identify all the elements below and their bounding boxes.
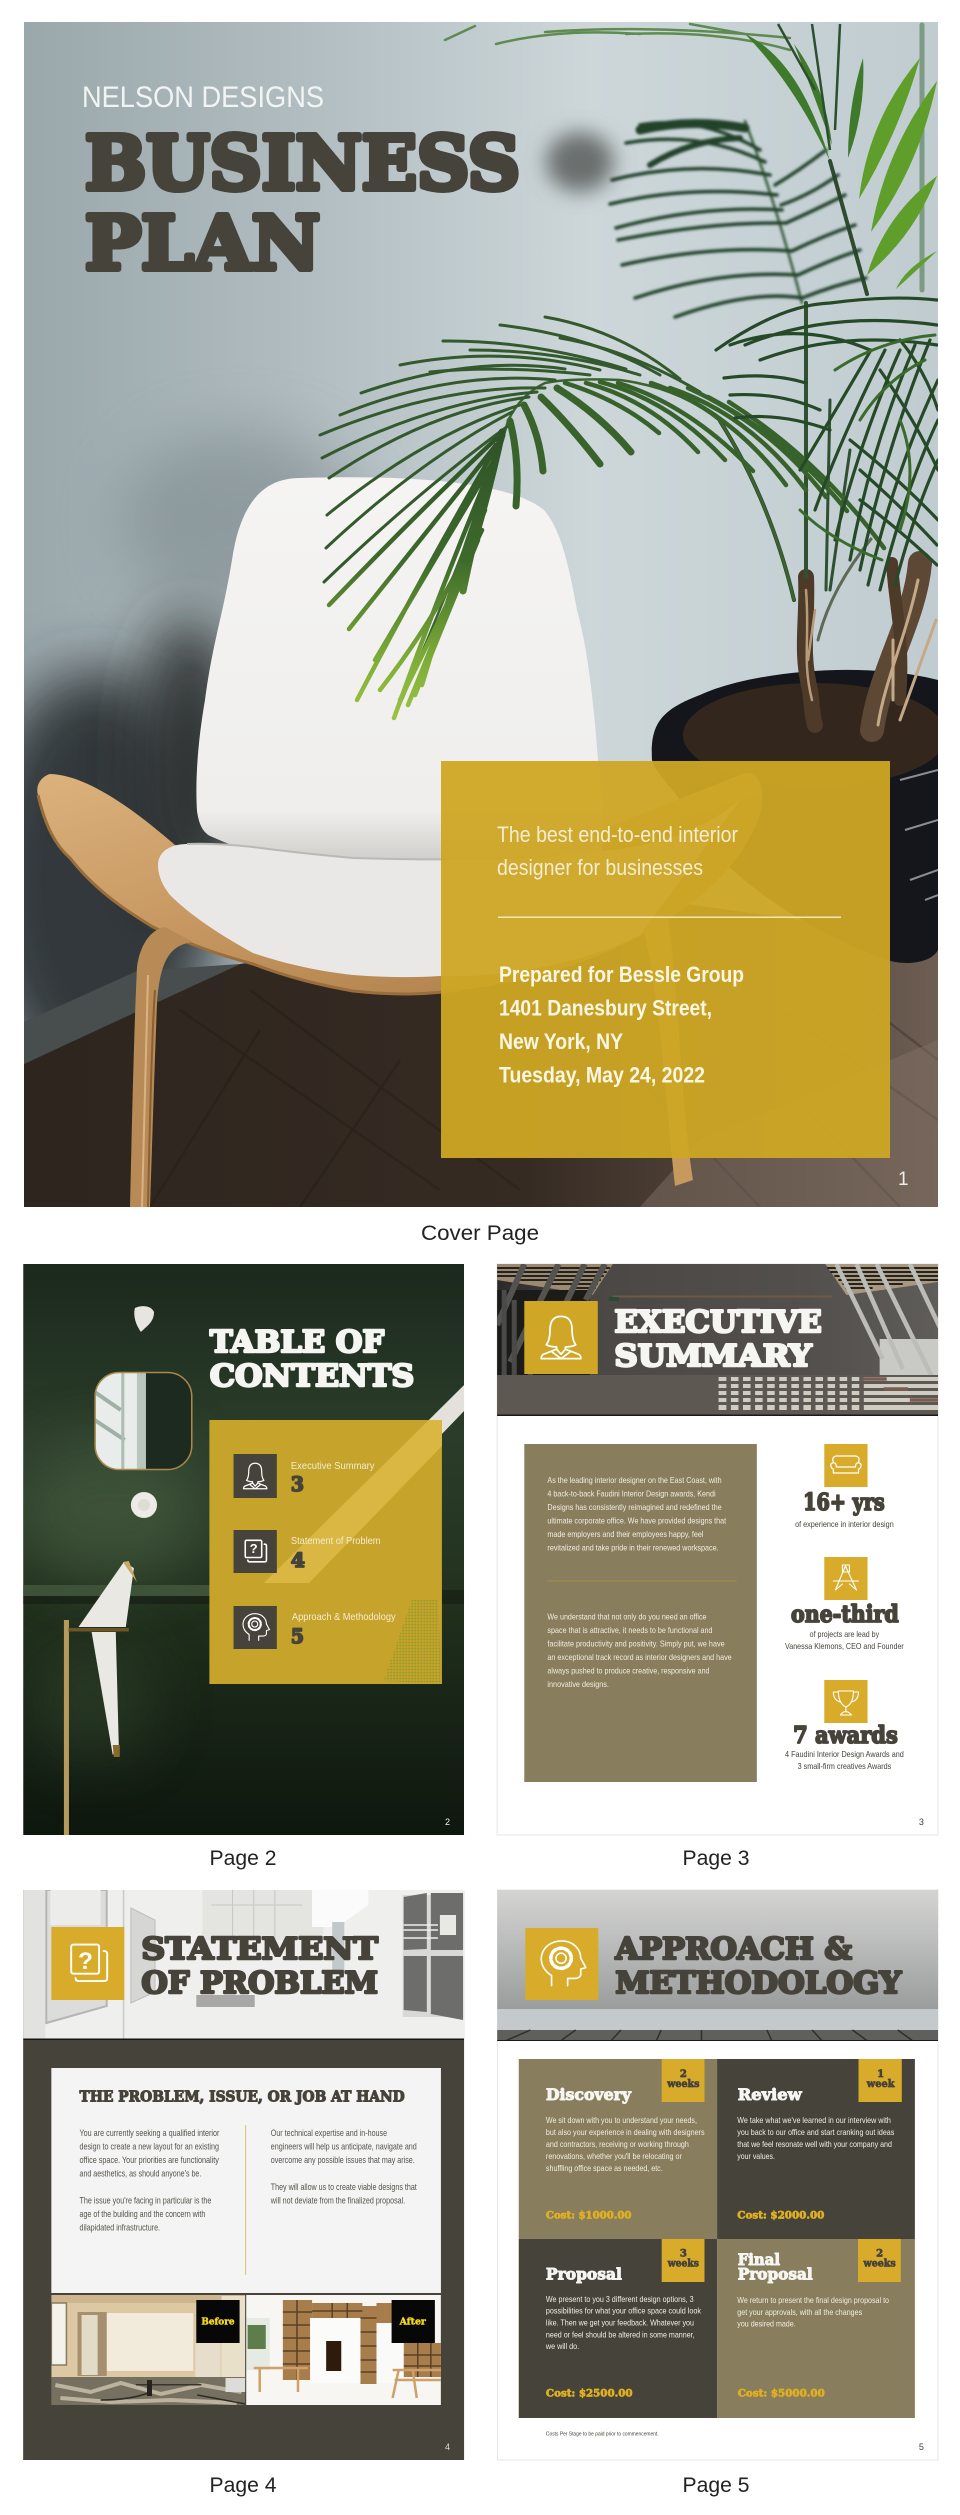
after photo — [246, 2295, 442, 2405]
card: review: you back to our office and start cranking out ideas — [737, 2127, 894, 2137]
olive text panel: always pushed to produce creative, responsive and — [547, 1666, 710, 1675]
panel: page 2 table of contents — [10, 1264, 464, 1835]
prepared-for details: Prepared for Bessle Group — [499, 962, 744, 987]
tagline: The best end-to-end interior — [497, 822, 738, 847]
olive text panel: space that is attractive, it needs to be functional and — [547, 1625, 713, 1635]
heading — [614, 1304, 822, 1373]
white text card: and aesthetics, as should anyone's be. — [80, 2169, 201, 2178]
panel: cover page — [0, 22, 947, 1207]
olive text panel: made employers and their employees happy, feel — [547, 1529, 704, 1539]
card: proposal — [519, 2239, 717, 2418]
card: discovery: shuffling office space as needed, etc. — [546, 2163, 663, 2173]
white text card: They will allow us to create viable designs that — [271, 2182, 417, 2192]
rosette — [131, 1492, 157, 1518]
tagline: designer for businesses — [497, 855, 703, 880]
card: discovery: weeks — [666, 2079, 700, 2090]
origami bird — [79, 1561, 137, 1757]
card: final proposal: Cost: $5000.00 — [738, 2388, 825, 2399]
left lattice — [497, 1264, 613, 1295]
card: final proposal: Proposal — [738, 2265, 813, 2283]
heading: OF PROBLEM — [141, 1965, 378, 2000]
card: proposal: Proposal — [546, 2265, 622, 2283]
tagline — [497, 822, 738, 880]
plant stems — [720, 25, 922, 640]
stat: one-third: Vanessa Klemons, CEO and Founder — [785, 1641, 904, 1651]
stat: one-third — [785, 1557, 904, 1651]
olive text panel: facilitate productivity and positivity. Simply put, we have — [547, 1639, 725, 1648]
page number: 1 — [898, 1169, 909, 1190]
panel: page 3 executive summary — [497, 1264, 942, 1835]
right lattice — [825, 1264, 938, 1295]
white text card: office space. Your priorities are functionality — [80, 2155, 219, 2165]
stat: years — [795, 1444, 894, 1529]
wall bird — [134, 1306, 154, 1332]
caption: Page 4 — [210, 2474, 277, 2497]
card: proposal: We present to you 3 different design options, 3 — [546, 2294, 694, 2304]
page number: 3 — [919, 1817, 924, 1827]
title — [85, 121, 520, 287]
olive text panel: revitalized and take pride in their renewed workspace. — [547, 1543, 719, 1552]
palm: upright leaves — [745, 34, 863, 161]
heading — [614, 1931, 902, 2000]
icon box: head with gear — [525, 1928, 598, 2000]
caption: Cover Page — [421, 1222, 539, 1245]
card: review: Review — [738, 2085, 802, 2104]
white text card: age of the building and the concern with — [80, 2209, 205, 2219]
stat: one-third: of projects are lead by — [810, 1629, 880, 1639]
chair cushion — [158, 844, 441, 978]
baseboard — [24, 964, 240, 1064]
item: executive summary — [234, 1454, 374, 1498]
card: proposal: weeks — [667, 2259, 699, 2269]
contents panel — [209, 1420, 442, 1684]
heading: CONTENTS — [210, 1358, 414, 1393]
stat: one-third: one-third — [791, 1601, 899, 1628]
before photo — [51, 2295, 246, 2405]
olive text panel: As the leading interior designer on the East Coast, with — [547, 1475, 722, 1485]
card: proposal: need or feel should be altered in some manner, — [546, 2330, 695, 2339]
heading — [210, 1324, 414, 1393]
trunks — [805, 563, 936, 730]
card: final proposal: Final — [738, 2250, 780, 2269]
stat: awards: 3 small-firm creatives Awards — [798, 1761, 891, 1771]
panel: page 4 statement of problem — [23, 1890, 464, 2460]
white text card — [51, 2068, 441, 2293]
label: before: Before — [201, 2317, 235, 2327]
card: discovery — [519, 2059, 717, 2239]
item: approach and methodology — [234, 1606, 396, 1649]
card: discovery: but also your experience in dealing with designers — [546, 2127, 705, 2137]
card: final proposal: weeks — [863, 2259, 896, 2269]
item: statement of problem — [234, 1530, 381, 1573]
card: discovery: renovations, whether you'll be relocating or — [546, 2151, 682, 2161]
white text card: overcome any possible issues that may arise. — [271, 2155, 415, 2165]
card: final proposal — [717, 2239, 915, 2418]
prepared-for details: New York, NY — [499, 1029, 623, 1054]
card: proposal: we will do. — [545, 2341, 579, 2351]
panel: page 5 approach and methodology — [497, 1890, 938, 2460]
item: statement of problem: ? — [250, 1541, 258, 1556]
card: review: We take what we've learned in our interview with — [737, 2115, 891, 2125]
prepared-for details: Tuesday, May 24, 2022 — [499, 1063, 705, 1088]
floor — [24, 900, 938, 1207]
caption: Page 3 — [682, 1847, 750, 1870]
heading: SUMMARY — [614, 1338, 813, 1373]
heading: TABLE OF — [210, 1324, 384, 1359]
olive text panel: We understand that not only do you need an office — [547, 1612, 707, 1621]
item: executive summary: 3 — [291, 1472, 304, 1496]
item: executive summary: Executive Summary — [291, 1461, 374, 1472]
card: final proposal: you desired made. — [737, 2319, 796, 2328]
item: approach and methodology: Approach & Methodology — [292, 1612, 396, 1623]
room photo — [10, 1264, 464, 1835]
item: approach and methodology: 5 — [291, 1624, 304, 1648]
card: proposal: Cost: $2500.00 — [546, 2388, 633, 2399]
white text card: The issue you're facing in particular is the — [80, 2196, 211, 2205]
white text card: Our technical expertise and in-house — [271, 2128, 387, 2138]
card: proposal: like. Then we get your feedback. Whatever you — [546, 2318, 694, 2328]
stat: awards: 4 Faudini Interior Design Awards and — [785, 1749, 904, 1759]
card: review — [717, 2059, 915, 2239]
card: discovery: Discovery — [546, 2085, 632, 2104]
heading: EXECUTIVE — [614, 1304, 822, 1339]
heading — [141, 1931, 378, 2000]
item: statement of problem: 4 — [291, 1548, 305, 1572]
title: PLAN — [85, 201, 320, 287]
title: BUSINESS — [85, 121, 520, 207]
card: discovery: 2 — [680, 2069, 687, 2080]
stat: years: 16+ yrs — [803, 1489, 885, 1516]
label: after: After — [399, 2317, 427, 2327]
palm: blurred back frond — [610, 121, 866, 317]
company name: NELSON DESIGNS — [82, 81, 324, 114]
chair back — [196, 477, 603, 870]
caption: Page 2 — [210, 1847, 276, 1870]
caption: Page 5 — [682, 2474, 750, 2497]
card: review: that we feel resonate well with your company and — [737, 2139, 892, 2149]
palm: drooping frond — [394, 379, 794, 718]
white text card: will not deviate from the finalized proposal. — [270, 2196, 405, 2205]
olive text panel: 4 back-to-back Faudini Interior Design awards, Kendi — [547, 1489, 716, 1498]
cover photo: chair and palm — [0, 22, 947, 1207]
card: proposal: possibilities for what your office space could look — [546, 2306, 702, 2316]
chair legs — [130, 927, 193, 1207]
prepared-for details — [499, 962, 744, 1088]
prepared-for details: 1401 Danesbury Street, — [499, 996, 712, 1020]
mirror — [146, 1374, 191, 1469]
header photo — [23, 1890, 464, 2040]
gold text panel — [441, 761, 890, 1158]
item: statement of problem: Statement of Problem — [291, 1536, 381, 1547]
moulding strip — [429, 1385, 464, 1434]
olive text panel — [524, 1444, 757, 1782]
icon box: woman — [524, 1301, 598, 1374]
white text card: dilapidated infrastructure. — [80, 2223, 160, 2232]
stat: years: of experience in interior design — [795, 1519, 894, 1529]
olive text panel: an exceptional track record as interior designers and have — [547, 1652, 732, 1662]
card: final proposal: We return to present the final design proposal to — [737, 2295, 889, 2305]
page number: 2 — [445, 1817, 450, 1827]
stat: awards — [785, 1680, 904, 1771]
olive text panel: Designs has consistently reimagined and redefined the — [547, 1502, 722, 1512]
white text card: You are currently seeking a qualified interior — [80, 2128, 219, 2138]
card: review: 1 — [877, 2069, 884, 2080]
card: review: Cost: $2000.00 — [737, 2210, 824, 2221]
white text card: engineers will help us anticipate, navigate and — [271, 2142, 417, 2151]
card: final proposal: get your approvals, with all the changes — [737, 2307, 862, 2317]
white text card: design to create a new layout for an existing — [80, 2142, 219, 2151]
palm: top frond — [445, 24, 790, 50]
header photo — [497, 1264, 942, 1416]
heading: STATEMENT — [141, 1931, 378, 1966]
stat: awards: 7 awards — [793, 1722, 898, 1749]
card: proposal: 3 — [680, 2249, 687, 2259]
pot — [652, 670, 938, 963]
card: discovery: We sit down with you to understand your needs, — [546, 2115, 697, 2125]
brass stand — [64, 1620, 69, 1835]
heading: METHODOLOGY — [615, 1965, 902, 2000]
icon box: question cards — [51, 1927, 124, 2000]
white text card: THE PROBLEM, ISSUE, OR JOB AT HAND — [80, 2089, 405, 2105]
olive text panel: ultimate corporate office. We have provided designs that — [547, 1516, 727, 1525]
card: discovery: Cost: $1000.00 — [546, 2210, 632, 2221]
card: final proposal: 2 — [876, 2249, 883, 2259]
header photo — [497, 1890, 938, 2042]
page number: 4 — [445, 2442, 450, 2452]
label: after — [392, 2300, 435, 2343]
card: review: your values. — [737, 2151, 775, 2161]
icon box: question cards: ? — [78, 1948, 93, 1975]
card: review: week — [866, 2079, 896, 2090]
footnote: Costs Per Stage to be paid prior to commencement. — [546, 2432, 659, 2437]
chair shell — [37, 773, 762, 994]
palm: lower right cluster — [716, 298, 938, 590]
label: before — [196, 2300, 240, 2343]
olive text panel: innovative designs. — [547, 1679, 609, 1689]
page number: 5 — [919, 2442, 924, 2452]
floor — [497, 1375, 938, 1416]
card: discovery: and contractors, receiving or working through — [546, 2139, 689, 2149]
heading: APPROACH & — [614, 1931, 852, 1966]
